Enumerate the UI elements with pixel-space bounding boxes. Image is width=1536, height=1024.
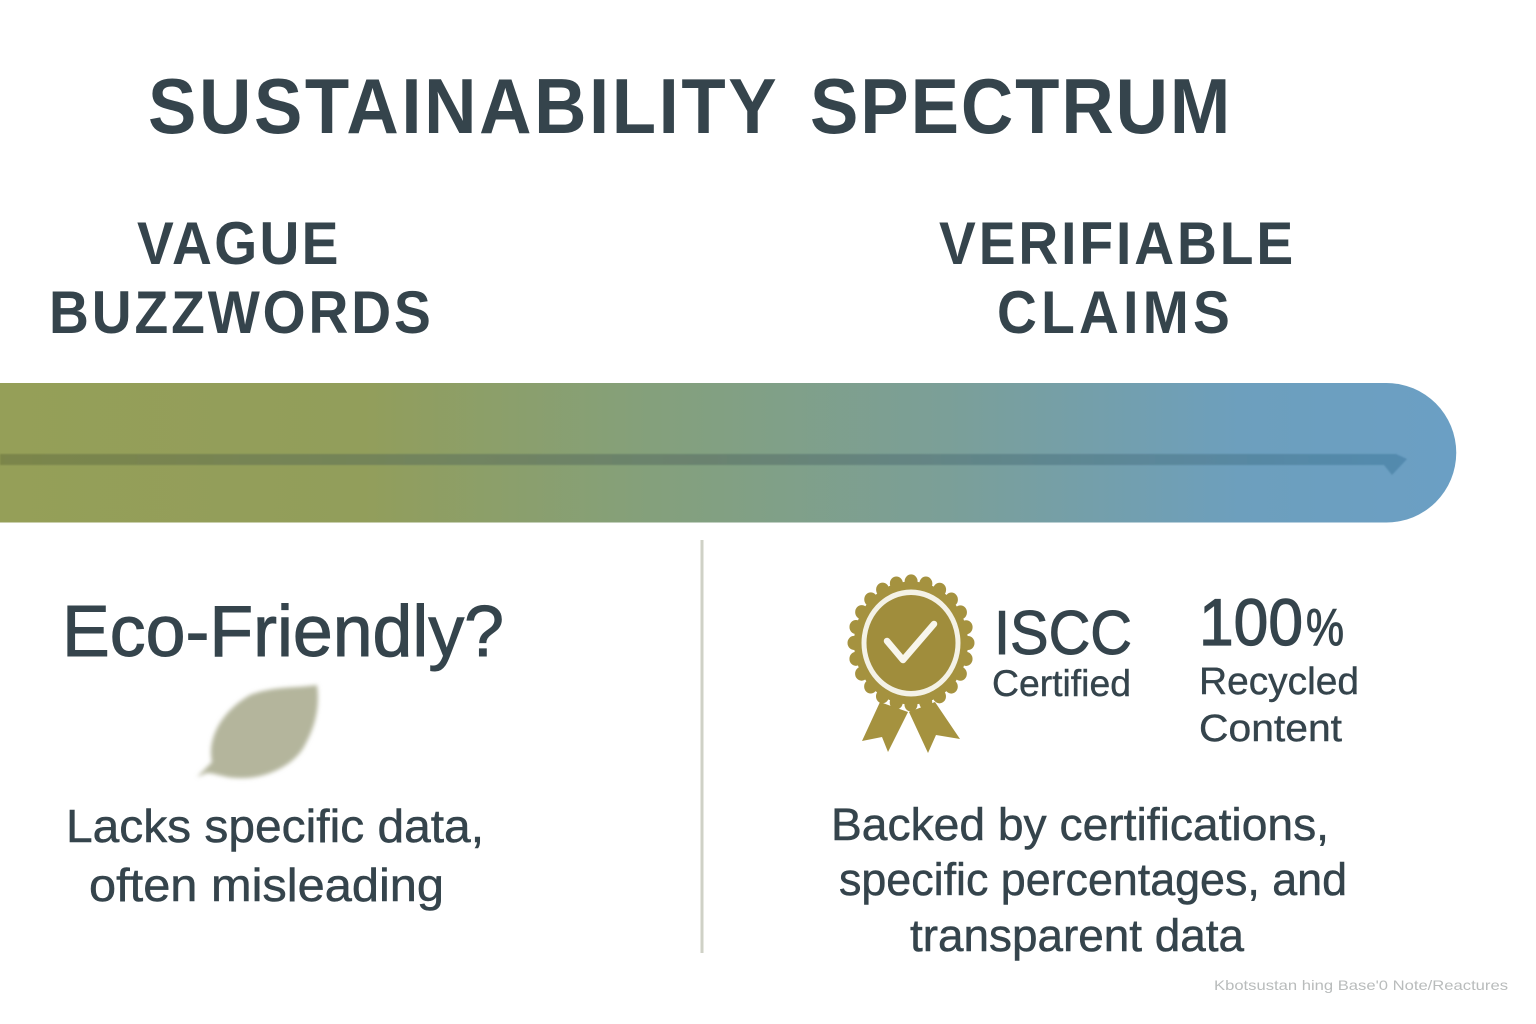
center divider	[700, 540, 704, 953]
ISCC certified label: Certified	[992, 663, 1131, 704]
heading: verifiable claims: CLAIMS	[997, 280, 1230, 347]
verifiable description: transparent data	[910, 910, 1245, 961]
left panel: vague claim	[62, 592, 504, 911]
verifiable description: Backed by certifications,	[831, 799, 1329, 850]
100% recycled content label: Recycled	[1199, 661, 1359, 703]
ISCC certified label: ISCC	[994, 599, 1132, 668]
heading: vague buzzwords: VAGUE	[137, 211, 338, 278]
100% recycled content label: 100	[1199, 585, 1303, 659]
spectrum bar with arrow	[0, 383, 1456, 522]
right panel: verifiable claims	[831, 581, 1359, 961]
heading: verifiable claims	[939, 211, 1293, 347]
title	[148, 63, 1230, 150]
check mark	[887, 624, 934, 660]
ribbon tails	[862, 702, 960, 753]
100% recycled content label	[1199, 585, 1359, 750]
title: SPECTRUM	[810, 63, 1230, 150]
heading: vague buzzwords: BUZZWORDS	[49, 280, 431, 347]
100% recycled content label: Content	[1199, 708, 1342, 750]
vague description: often misleading	[89, 859, 444, 911]
verifiable description: specific percentages, and	[839, 854, 1347, 905]
arrow line	[0, 454, 1407, 475]
gradient bar	[0, 383, 1456, 522]
scalloped seal	[854, 581, 968, 705]
vague description: Lacks specific data,	[66, 800, 484, 852]
white ring	[864, 592, 958, 694]
100% recycled content label: %	[1306, 599, 1344, 657]
heading: vague buzzwords	[49, 211, 431, 347]
footer note: Kbotsustan hing Base'0 Note/Reactures	[1214, 977, 1508, 993]
eco-friendly heading: Eco-Friendly?	[62, 592, 504, 672]
heading: verifiable claims: VERIFIABLE	[939, 211, 1293, 278]
icon: certification badge	[854, 581, 968, 753]
icon: faded leaf	[197, 685, 318, 778]
verifiable description	[831, 799, 1347, 961]
ISCC certified label	[992, 599, 1132, 704]
vague description	[66, 800, 484, 911]
title: SUSTAINABILITY	[148, 63, 777, 150]
